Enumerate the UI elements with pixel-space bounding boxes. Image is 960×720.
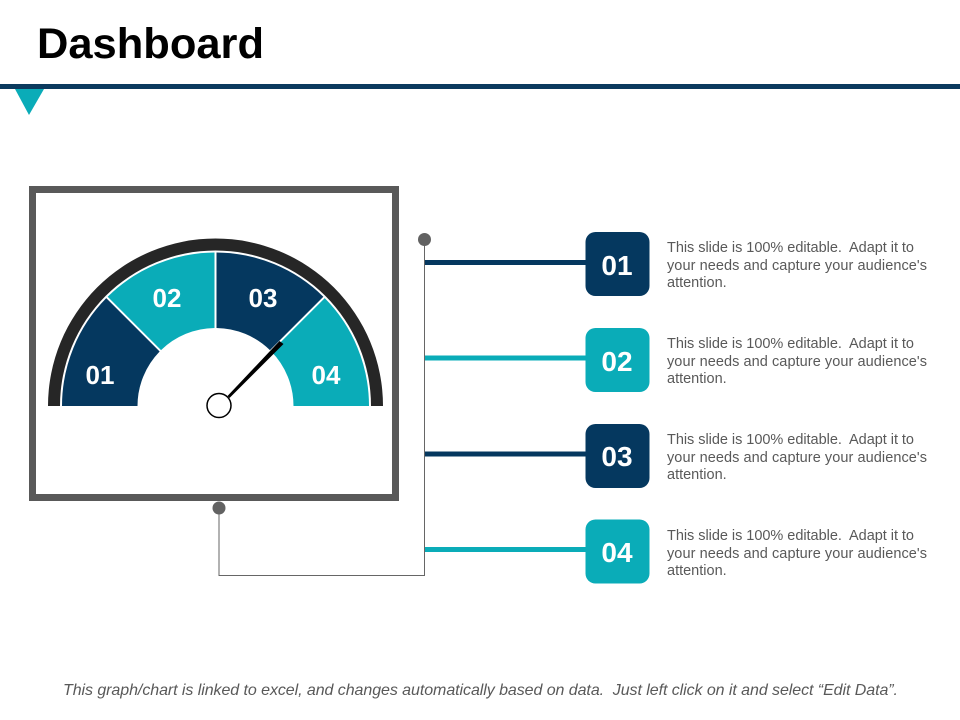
gauge outer arc xyxy=(48,238,383,406)
row 02 xyxy=(425,328,927,392)
row 02 description xyxy=(667,336,927,387)
gauge label 01: 01 xyxy=(86,360,114,390)
row 03 description xyxy=(667,432,927,483)
row 03 xyxy=(425,424,927,488)
row 04 description xyxy=(667,528,927,579)
gauge label 03: 03 xyxy=(249,283,277,313)
row 02 description: This slide is 100% editable. Adapt it to xyxy=(667,336,914,352)
row 04 description: your needs and capture your audience's xyxy=(667,546,927,562)
row 03 connector xyxy=(425,452,590,456)
row 02 description: your needs and capture your audience's xyxy=(667,354,927,370)
row 02 badge xyxy=(586,328,650,392)
connector dot: frame xyxy=(212,502,226,514)
row 03 number: 03 xyxy=(601,441,633,472)
row 04 number: 04 xyxy=(601,537,633,568)
row 04 description: attention. xyxy=(667,563,727,579)
gauge segment 01 xyxy=(62,298,160,406)
gauge frame xyxy=(32,190,396,498)
connector lines xyxy=(219,240,424,576)
row 03 description: attention. xyxy=(667,467,727,483)
row 04 description: This slide is 100% editable. Adapt it to xyxy=(667,528,914,544)
row 01 description: This slide is 100% editable. Adapt it to xyxy=(667,240,914,256)
row 04 xyxy=(425,520,927,584)
gauge label 04: 04 xyxy=(312,360,341,390)
gauge needle hub xyxy=(207,394,231,418)
row 02 number: 02 xyxy=(601,346,633,377)
connector dot: top xyxy=(418,233,431,246)
row 01 connector xyxy=(425,260,590,265)
footer note: This graph/chart is linked to excel, and changes automatically based on data. Just left click on it and select “Edit Data”. xyxy=(63,682,898,699)
gauge panel xyxy=(32,190,396,498)
row 02 connector xyxy=(425,356,590,360)
row 01 number: 01 xyxy=(601,250,633,281)
row 03 description: your needs and capture your audience's xyxy=(667,450,927,466)
gauge label 02: 02 xyxy=(153,283,181,313)
gauge needle xyxy=(228,341,284,398)
row 01 description: your needs and capture your audience's xyxy=(667,258,927,274)
gauge segment 02 xyxy=(108,252,214,350)
gauge segment 04 xyxy=(271,298,369,406)
header rule xyxy=(0,84,960,89)
row 03 badge xyxy=(586,424,650,488)
header triangle marker xyxy=(15,89,44,115)
gauge segment 03 xyxy=(216,252,323,350)
row 02 description: attention. xyxy=(667,371,727,387)
title: Dashboard xyxy=(37,20,264,68)
row 04 connector xyxy=(425,547,590,552)
row 01 description xyxy=(667,240,927,291)
row 01 xyxy=(425,232,927,296)
row 01 description: attention. xyxy=(667,275,727,291)
row 01 badge xyxy=(586,232,650,296)
row 03 description: This slide is 100% editable. Adapt it to xyxy=(667,432,914,448)
row 04 badge xyxy=(586,520,650,584)
